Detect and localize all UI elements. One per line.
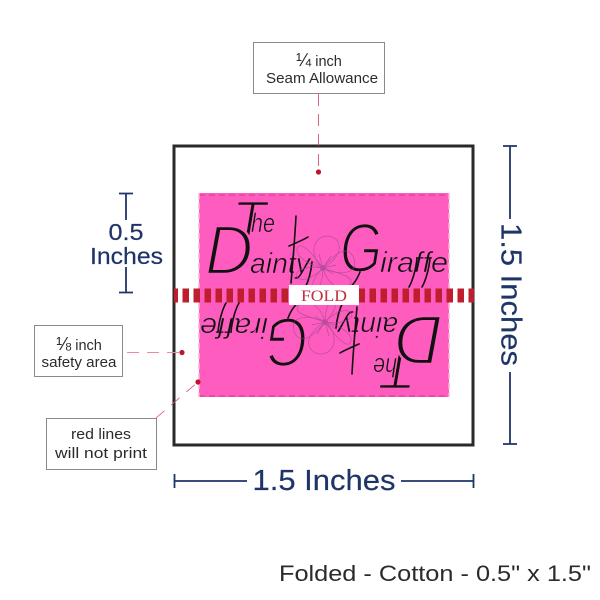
- callout: red lines: red lines: [71, 427, 131, 443]
- logo text upside down: D: [395, 301, 443, 379]
- callout: safety area: ⅛ inch: [56, 334, 102, 354]
- logo text upside down: he: [373, 352, 397, 382]
- fold line: [174, 285, 474, 305]
- callout: safety area: safety area: [42, 355, 117, 371]
- dimension: 1.5 inches height: 1.5 Inches: [494, 223, 526, 366]
- fold line: FOLD: [301, 288, 347, 305]
- callout: safety area: [34, 326, 185, 376]
- logo text upside down: iraffe: [200, 311, 268, 343]
- callout: red lines: will not print: [54, 446, 147, 462]
- callout: red lines: [46, 379, 201, 470]
- logo text upper: [205, 187, 448, 289]
- logo text upside down: G: [266, 303, 308, 381]
- logo text upper: G: [340, 209, 382, 287]
- pink label artwork: [199, 187, 449, 403]
- logo text upper: ainty: [250, 248, 311, 280]
- logo text upside down: T: [379, 331, 416, 403]
- logo text upper: iraffe: [380, 247, 448, 279]
- dimension: 0.5 inches height: Inches: [90, 243, 163, 269]
- dimension: 1.5 inches width: 1.5 Inches: [252, 465, 396, 497]
- dimension: 1.5 inches width: [174, 465, 474, 497]
- dimension: 1.5 inches height: [494, 146, 526, 444]
- icon: flower lower: [293, 301, 352, 354]
- callout: seam allowance: [254, 42, 384, 175]
- logo text upper: he: [251, 208, 275, 238]
- icon: flower upper: [296, 236, 355, 289]
- logo text upside down: [200, 301, 443, 403]
- garment label outline: [174, 146, 473, 445]
- dimension: 0.5 inches height: 0.5: [108, 219, 144, 245]
- caption: Folded - Cotton - 0.5" x 1.5": [279, 561, 591, 586]
- logo text upside down: ainty: [337, 310, 398, 342]
- callout: seam allowance: Seam Allowance: [266, 71, 378, 87]
- logo text upper: T: [232, 187, 269, 259]
- dimension: 0.5 inches height: [90, 194, 163, 292]
- logo text upper: D: [205, 211, 253, 289]
- callout: seam allowance: ¼ inch: [296, 50, 342, 70]
